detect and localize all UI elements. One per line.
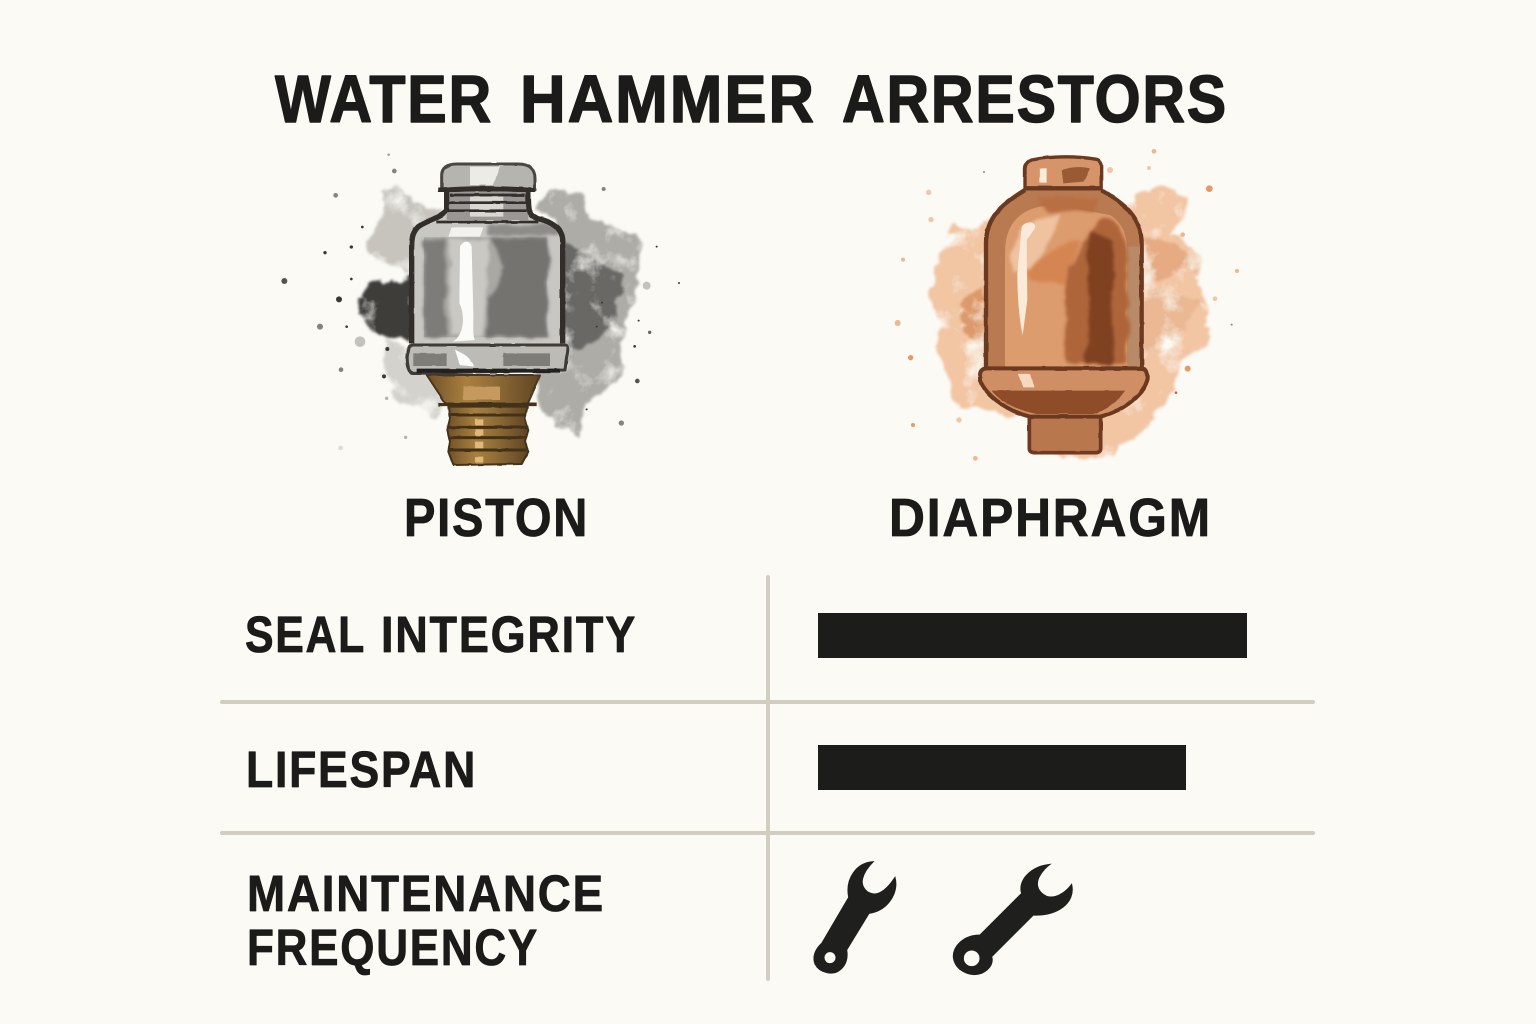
infographic canvas <box>220 74 1315 981</box>
row label: lifespan: LIFESPAN <box>246 741 477 798</box>
piston cap <box>438 164 535 191</box>
heading: diaphragm: DIAPHRAGM <box>889 488 1212 548</box>
title: WATER <box>275 62 493 137</box>
icon: wrench 1 <box>814 862 896 973</box>
piston body <box>407 164 568 465</box>
panel: piston illustration <box>281 153 680 465</box>
bar: lifespan <box>818 745 1186 790</box>
copper spatter <box>895 149 1239 461</box>
copper tank body <box>980 157 1148 453</box>
bar: seal integrity <box>818 613 1247 658</box>
copper watercolor wash <box>930 187 1213 460</box>
row label: maintenance frequency <box>247 865 605 976</box>
title <box>275 62 1228 137</box>
table grid <box>220 575 1315 981</box>
ink spatter <box>281 153 680 450</box>
copper cap <box>1024 157 1102 189</box>
copper collar <box>980 368 1148 417</box>
row label: maintenance frequency: FREQUENCY <box>247 919 539 976</box>
panel: diaphragm illustration <box>895 149 1239 461</box>
title: ARRESTORS <box>842 62 1228 137</box>
row label: seal integrity <box>245 606 637 663</box>
icon: wrench 2 <box>953 864 1072 974</box>
row label: maintenance frequency: MAINTENANCE <box>247 865 605 922</box>
icons: maintenance wrenches <box>814 862 1072 974</box>
brass base <box>427 375 540 465</box>
piston collar <box>407 345 568 373</box>
row label: seal integrity: SEAL <box>245 606 366 663</box>
title: HAMMER <box>520 62 816 137</box>
grey watercolor wash <box>357 188 640 440</box>
heading: piston: PISTON <box>404 488 589 548</box>
row label: seal integrity: INTEGRITY <box>381 606 637 663</box>
